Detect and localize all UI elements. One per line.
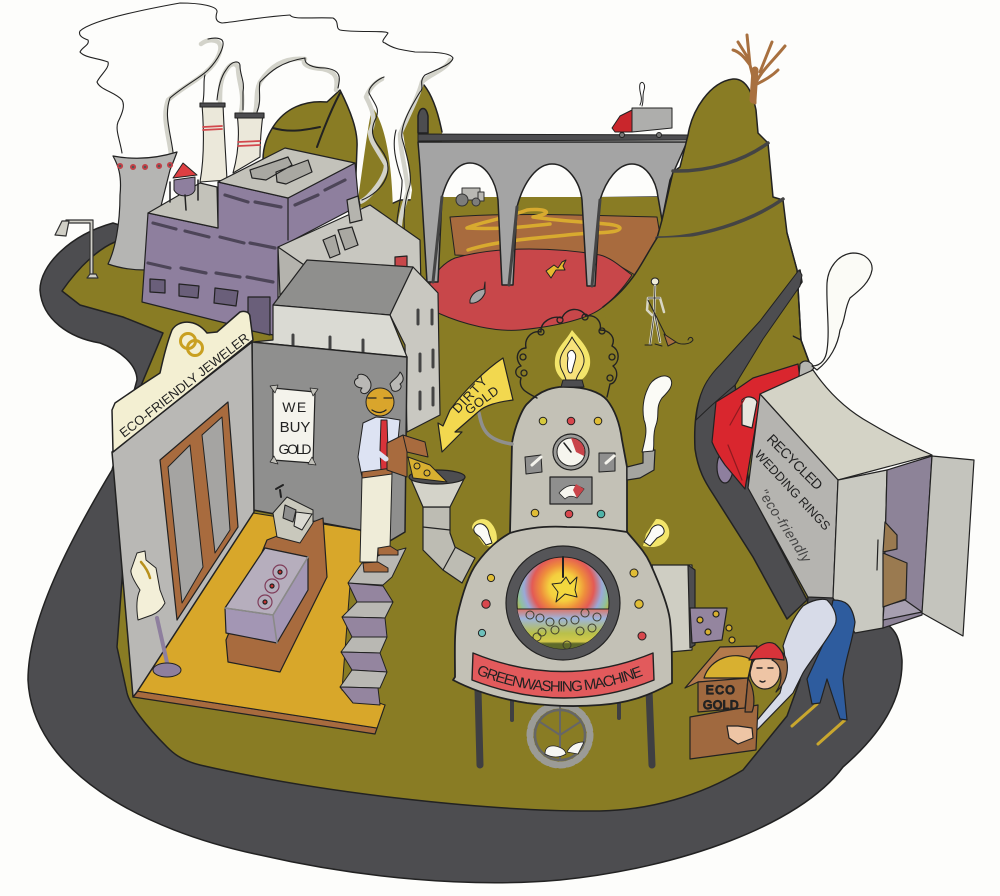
smoke plumes: [79, 3, 453, 258]
funnel and pipe: [409, 470, 475, 583]
hill: right with tiers: [603, 79, 812, 380]
display counter: [225, 518, 327, 672]
shop facade with door: [112, 342, 254, 697]
poster: we buy gold: WE: [282, 399, 308, 415]
arrow sign: dirty gold: GOLD: [462, 383, 502, 417]
mine pit: land, gold veins and red pool: [429, 197, 660, 330]
machine banner: greenwashing machine: [471, 652, 655, 699]
truck lettering: recycled wedding rings: RECYCLED: [764, 431, 826, 493]
jewelry shop floor: [133, 513, 392, 734]
truck lettering: recycled wedding rings: "eco-friendly: [755, 486, 815, 566]
machine: lower dome: [453, 527, 672, 706]
water tower: [170, 163, 198, 210]
cash register: [273, 485, 313, 543]
machine: gear with mice: [530, 705, 590, 765]
poster: we buy gold: BUY: [280, 419, 310, 436]
icons: gold nugget and fish in the pool: [470, 260, 566, 303]
mannequin with necklace: [131, 551, 181, 677]
worker: red cap: [749, 643, 784, 660]
arrow sign: dirty gold: DIRTY: [449, 373, 490, 416]
shop sign: eco-friendly jeweler: ECO-FRIENDLY JEWELER: [117, 330, 252, 440]
arrow sign: dirty gold: [438, 358, 513, 452]
cooling tower: [108, 152, 177, 270]
machine: porthole with rainbow, star and gold: [506, 546, 620, 660]
dead tree: [733, 35, 785, 103]
machine: side chute with gold: [652, 565, 735, 652]
shopkeeper handing over gold: [355, 372, 447, 572]
steps: zigzag stairs: [340, 548, 406, 705]
machine: exhaust pipe with steam: [627, 376, 672, 480]
tractor under the arch: [456, 188, 484, 206]
road: right lane upper: [696, 270, 802, 420]
worker: legs, body and head: [750, 599, 855, 744]
ground: olive landscape: [62, 197, 812, 811]
poster: we buy gold: [270, 385, 318, 465]
box: eco gold: ECO: [706, 683, 736, 697]
road: main loop: [28, 223, 902, 883]
truck lettering: recycled wedding rings: [752, 431, 833, 566]
tall grey house: [253, 260, 440, 432]
delivery truck: red cab: [712, 361, 814, 489]
machine: side bulbs: [472, 519, 669, 548]
machine: light bulb top: [555, 330, 590, 387]
bridge: arches: [418, 134, 688, 286]
lamp post: [55, 220, 98, 278]
factory: purple buildings: [142, 148, 360, 335]
skeleton with broom: [645, 278, 693, 346]
shop back wall: [252, 342, 407, 548]
box: eco gold: [685, 646, 758, 759]
delivery truck on bridge: [612, 82, 672, 138]
machine: dark legs: [478, 690, 652, 765]
hills: back left: [263, 85, 442, 282]
poster: we buy gold: GOLD: [278, 441, 312, 457]
factory: white annex: [278, 196, 421, 300]
road: right lane: [695, 270, 807, 619]
machine: upper body: [510, 387, 627, 535]
machine: wire coil: [516, 309, 618, 398]
box: eco gold: GOLD: [703, 698, 739, 712]
delivery truck: steam: [812, 253, 872, 370]
smoke stacks: [200, 103, 264, 182]
truck lettering: recycled wedding rings: WEDDING RINGS: [752, 447, 833, 533]
machine banner: greenwashing machine: GREENWASHING MACHINE: [478, 666, 643, 692]
delivery truck: cargo box: [748, 370, 974, 636]
